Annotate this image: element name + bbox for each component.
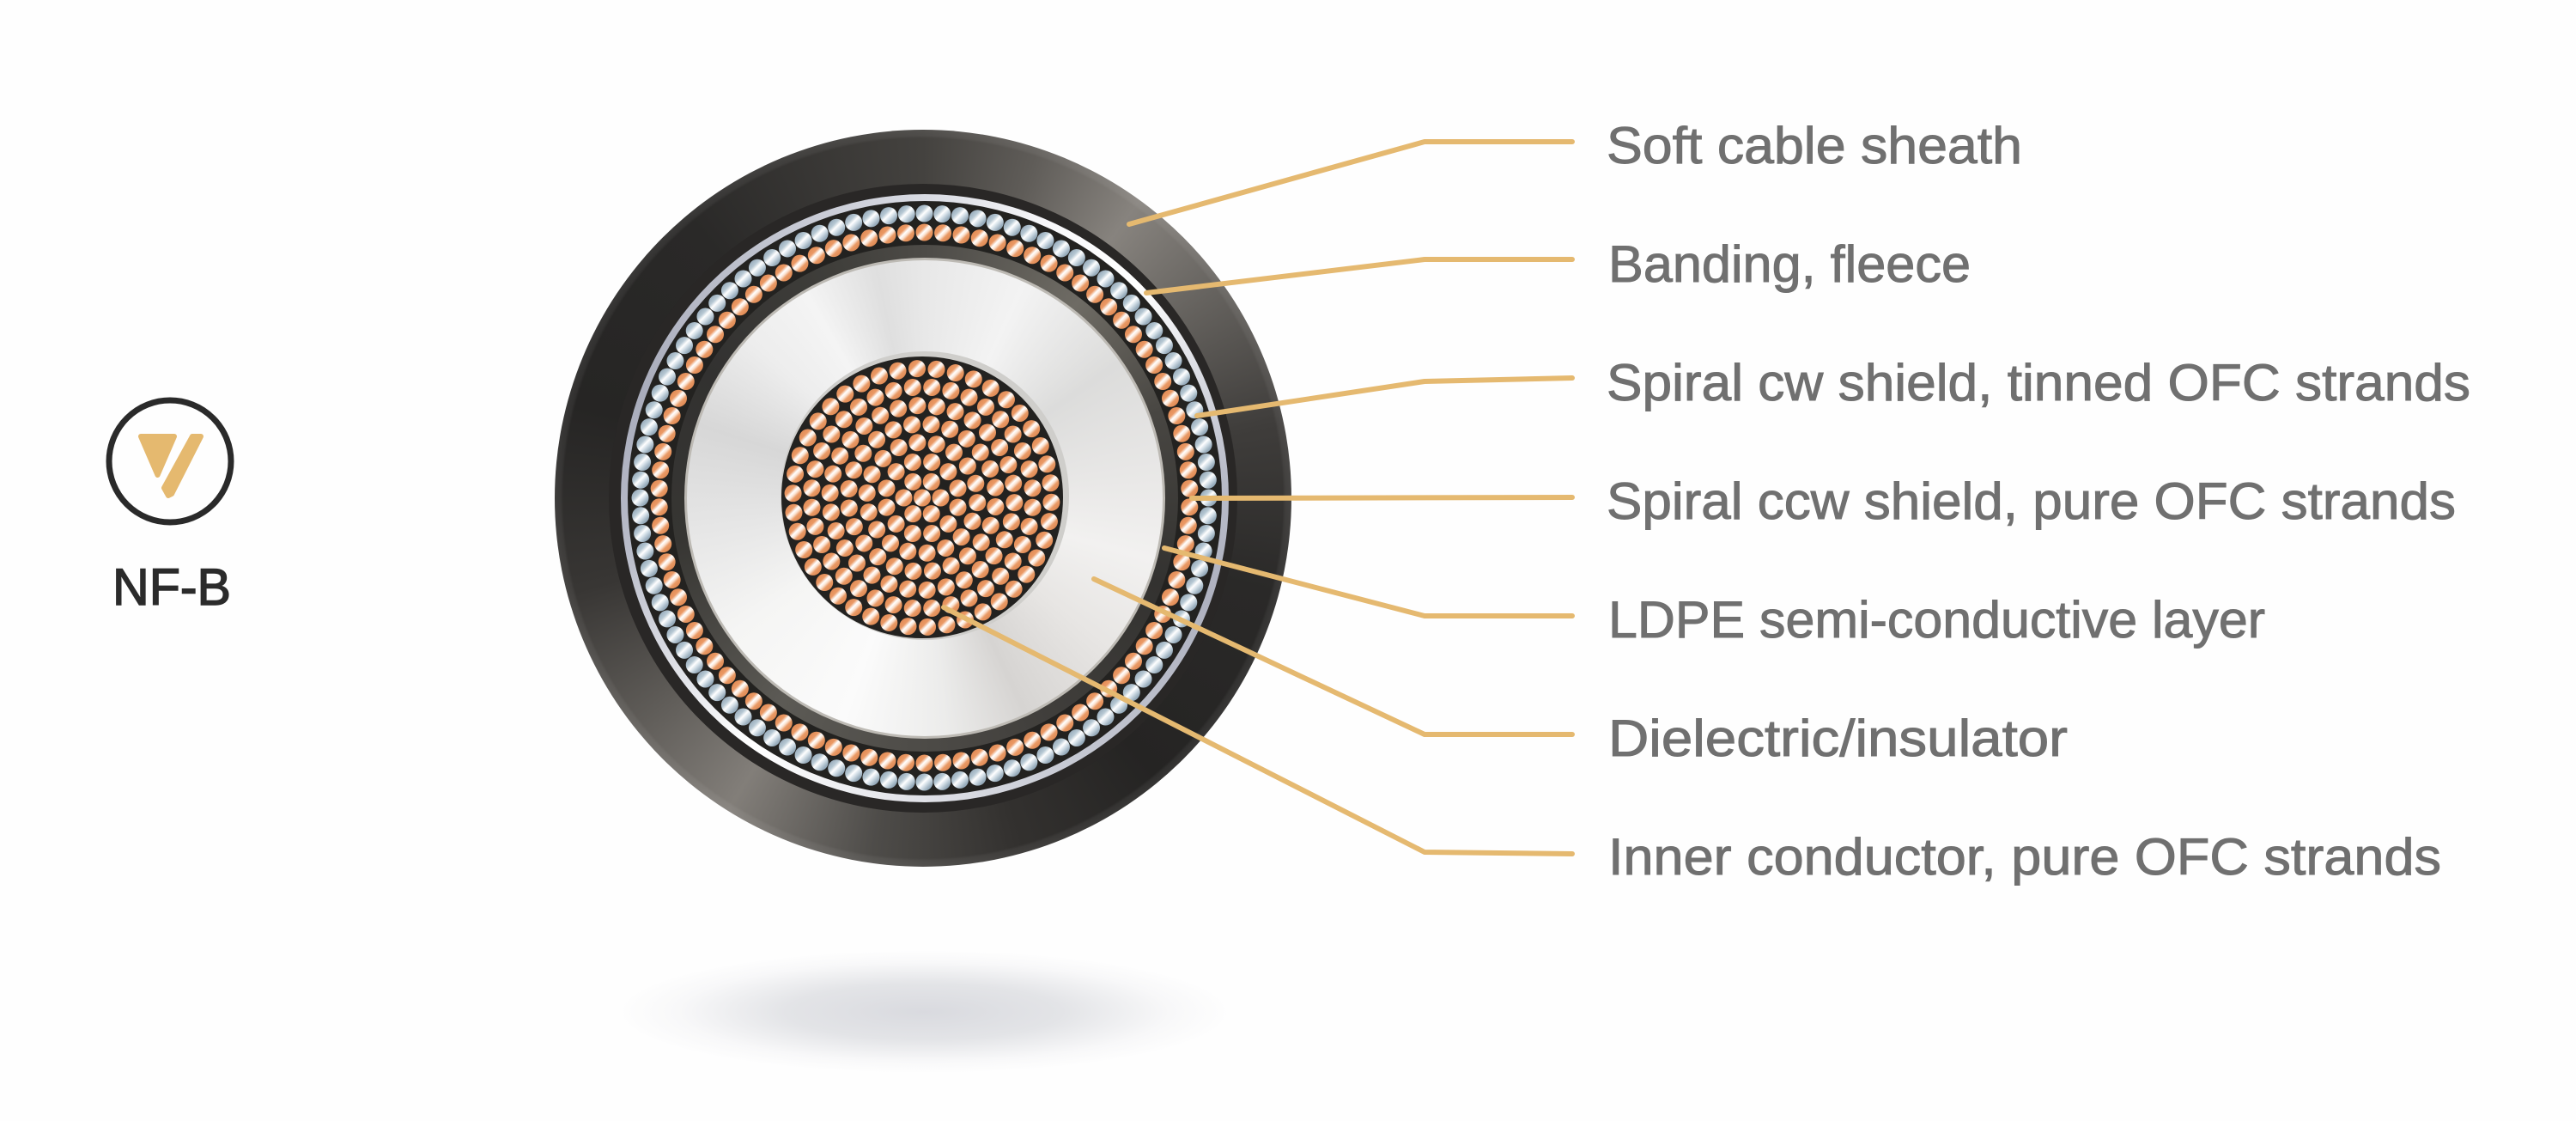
cable cross-section: [555, 130, 1291, 867]
strands: [632, 204, 1218, 790]
callout: inner conductor: [944, 607, 2441, 886]
core halo: [781, 351, 1069, 640]
callout: banding, fleece: Banding, fleece: [1608, 235, 1971, 293]
dielectric / insulator surface: [687, 259, 1163, 735]
spiral cw shield, tinned OFC strands: [632, 204, 1218, 791]
dielectric / insulator: [683, 258, 1164, 739]
callout: dielectric/insulator: [1094, 579, 2068, 767]
callout: LDPE semi-conductive layer: [1164, 548, 2265, 649]
icon: logo ring: [109, 400, 231, 522]
LDPE semi-conductive layer: [671, 244, 1178, 751]
callout: spiral ccw shield: Spiral ccw shield, pure OFC strands: [1607, 472, 2456, 530]
icon: logo V mark: [141, 436, 201, 496]
callout: soft cable sheath: [1129, 117, 2022, 224]
silver shield foil ring: [621, 194, 1229, 802]
callout: soft cable sheath: Soft cable sheath: [1607, 117, 2022, 174]
banding, fleece dark band: [609, 184, 1237, 813]
inner conductor bed: [781, 356, 1063, 638]
callout: dielectric/insulator: Dielectric/insulator: [1608, 710, 2068, 767]
callout: banding, fleece: [1146, 235, 1971, 293]
spiral ccw shield, pure OFC strands: [651, 223, 1198, 772]
black strand bed: [628, 201, 1222, 795]
callout: spiral cw shield: [1197, 354, 2470, 416]
callout: inner conductor: Inner conductor, pure OFC strands: [1608, 828, 2441, 886]
model name: NF-B: [112, 558, 231, 616]
inner conductor, pure OFC strands: [785, 360, 1060, 636]
callout: spiral cw shield: Spiral cw shield, tinned OFC strands: [1607, 354, 2470, 411]
soft cable sheath: [555, 130, 1291, 867]
callout: LDPE semi-conductive layer: LDPE semi-conductive layer: [1608, 591, 2265, 649]
